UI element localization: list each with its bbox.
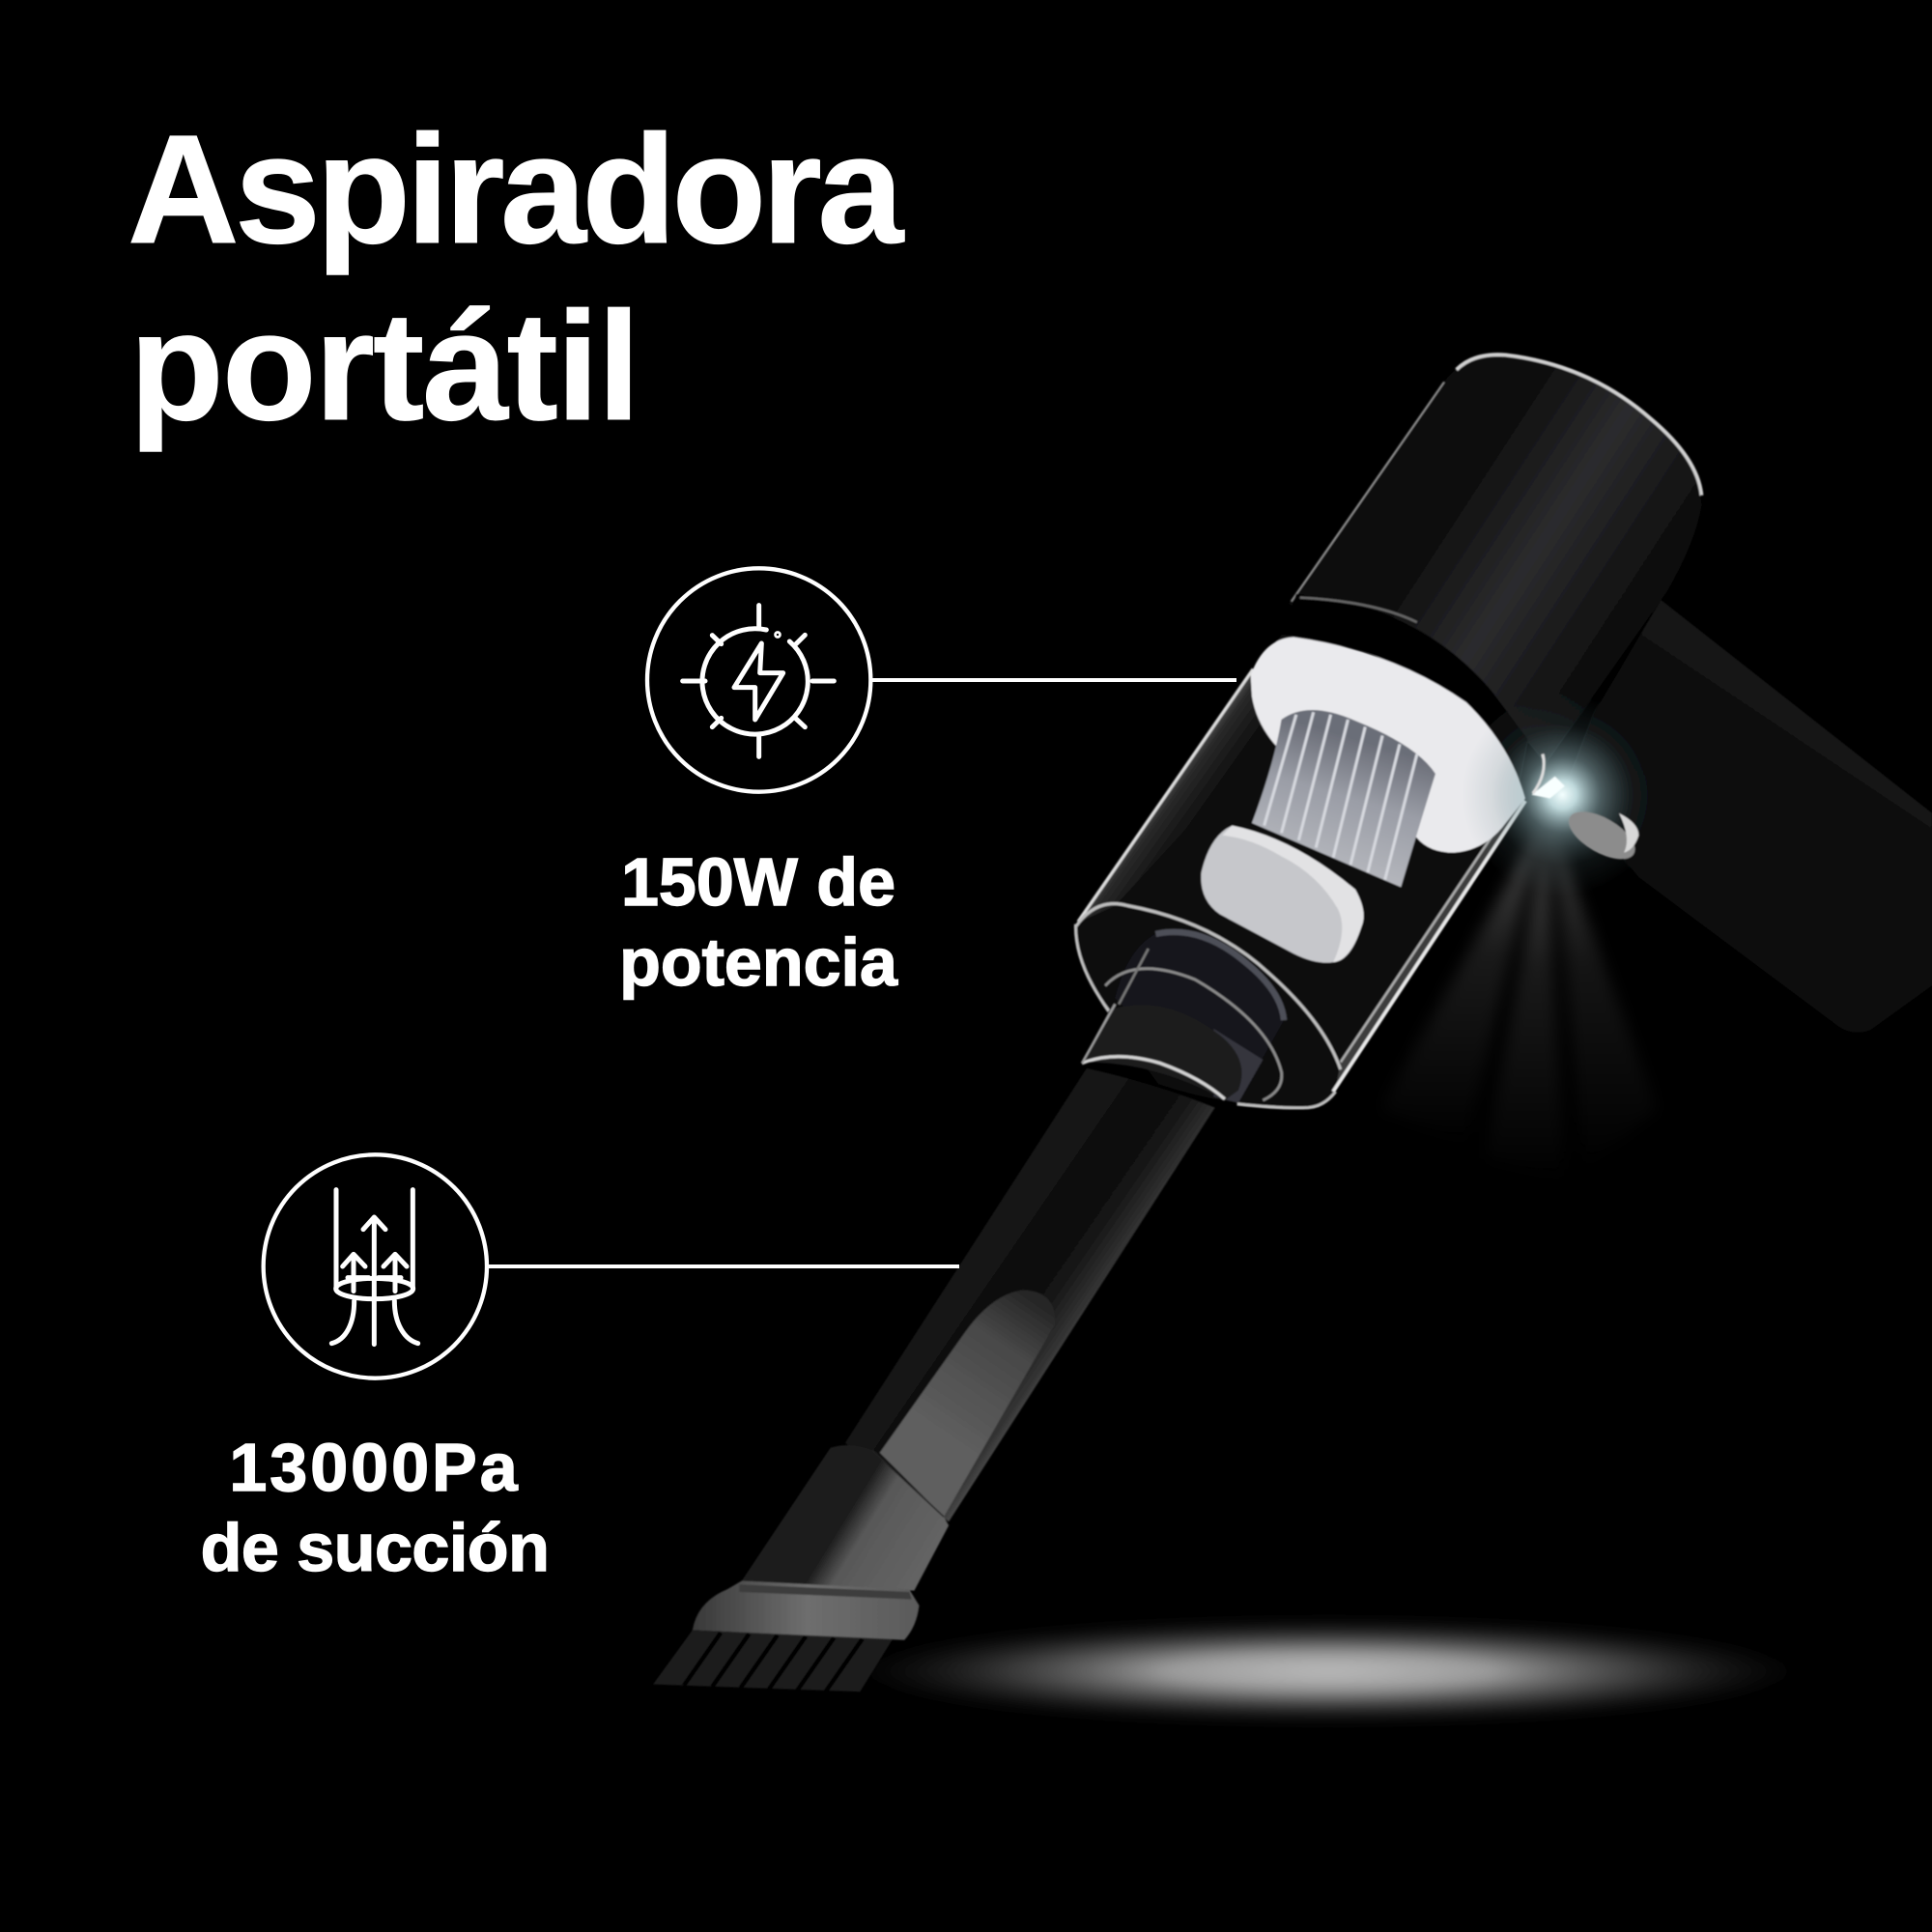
chamber left wall: [1079, 669, 1269, 922]
filter pleats: [1252, 710, 1435, 887]
title: Aspiradora: [128, 102, 904, 275]
left body edge: [1292, 382, 1444, 601]
nozzle flange: [693, 1580, 920, 1640]
upper body: [1282, 355, 1701, 788]
title: portátil: [129, 279, 639, 452]
connector line: [872, 678, 1236, 682]
flash glow and switch: [1462, 694, 1663, 895]
label: 150W de: [621, 844, 895, 920]
tube: [845, 1068, 1215, 1521]
inner neck: [1105, 931, 1284, 1103]
floor light reflection: [855, 1619, 1802, 1723]
handle: [1565, 600, 1932, 1033]
icon: suction airflow: [264, 1154, 487, 1378]
title: [128, 102, 904, 452]
callout: 150W de potencia: [619, 568, 1236, 1000]
nozzle: [742, 1445, 949, 1591]
tube cutaway: [880, 1290, 1055, 1517]
top cap rim: [1457, 355, 1701, 496]
label: 13000Pa: [229, 1430, 521, 1505]
callout: 13000Pa de succión: [201, 1154, 959, 1585]
callout: 150W de potencia: potencia: [619, 924, 898, 1000]
tube collar: [1082, 1005, 1242, 1100]
chamber base outline: [1075, 903, 1341, 1108]
connector line: [489, 1264, 959, 1268]
white ring: [1251, 637, 1525, 853]
callout: 13000Pa de succión: de succión: [201, 1510, 549, 1585]
clear chamber: [1075, 635, 1525, 1108]
filter cap: [1201, 826, 1364, 963]
brush bristles: [653, 1630, 892, 1691]
dark band: [1282, 594, 1528, 788]
chamber right wall: [1336, 804, 1523, 1090]
icon: power bolt in sun: [647, 568, 870, 792]
vacuum cleaner illustration: [653, 355, 1932, 1691]
light rays: [1380, 826, 1658, 1182]
